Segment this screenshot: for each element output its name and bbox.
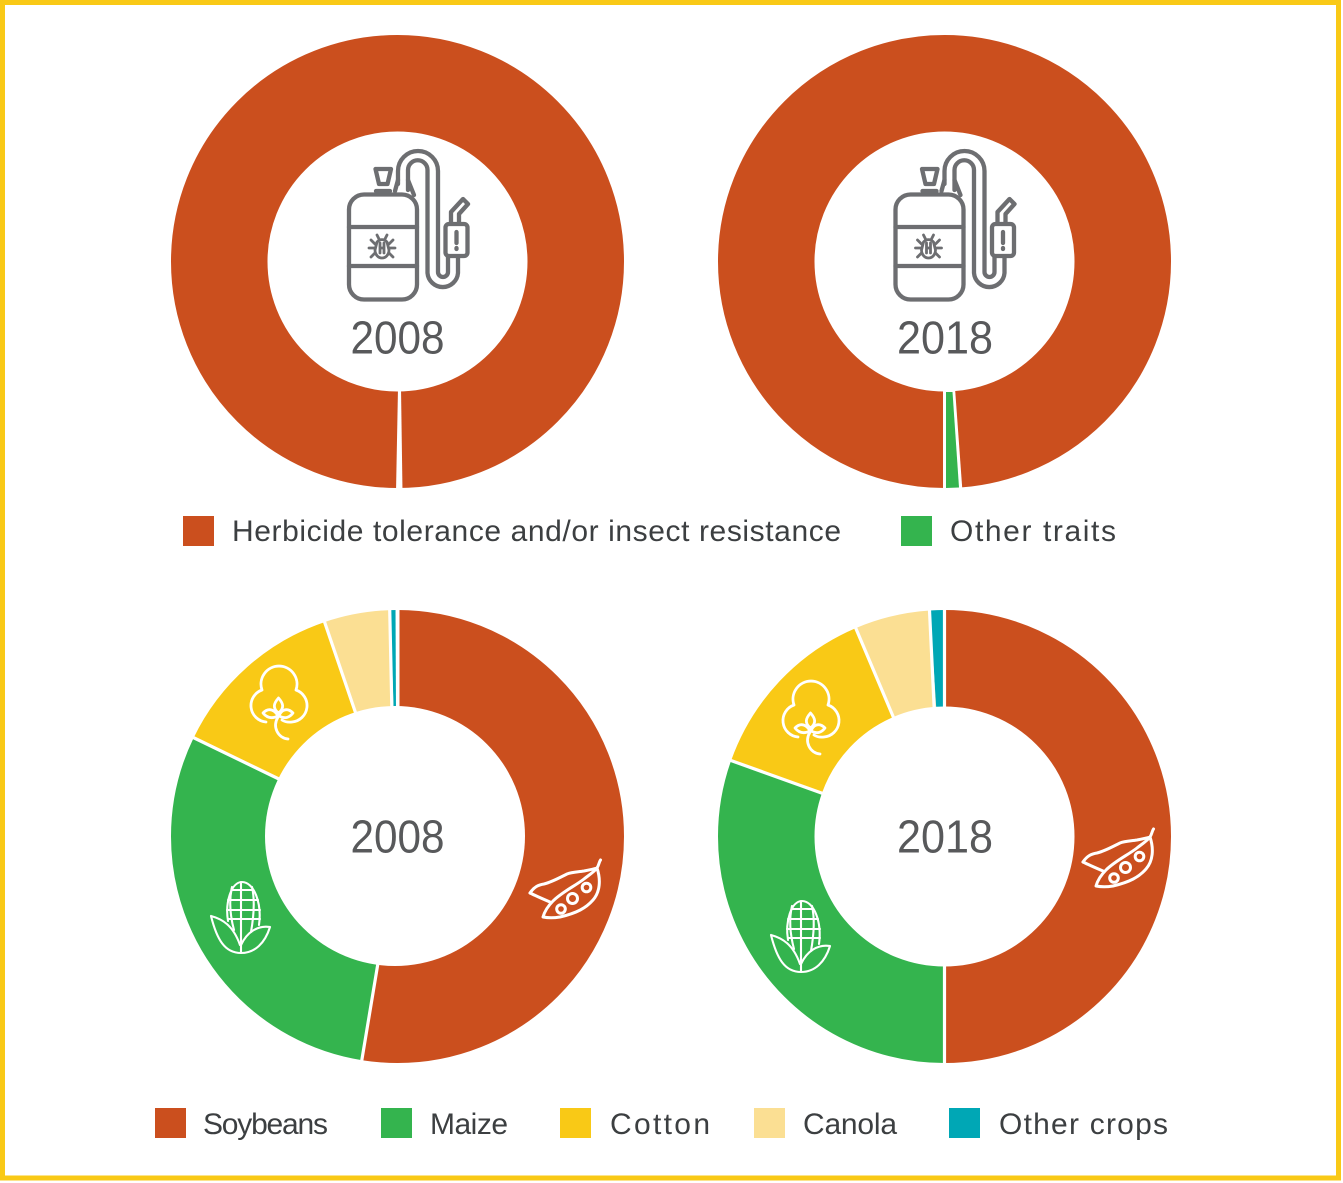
donut: traits 2018 — [766, 83, 1123, 492]
segment separators 2018 — [724, 600, 944, 1070]
icon: soybean pod 2008 — [530, 860, 600, 918]
donut: traits 2008 — [219, 83, 576, 492]
swatch: canola — [754, 1108, 785, 1138]
year label crops 2008: 2008 — [350, 810, 444, 862]
segment separators 2008 — [186, 600, 398, 1068]
year label 2018: 2018 — [897, 312, 993, 364]
swatch: cotton — [560, 1108, 591, 1138]
swatch: other traits — [901, 516, 932, 546]
ring segments 2018 — [766, 658, 1123, 1015]
year label crops 2018: 2018 — [897, 810, 993, 862]
label: soybeans: Soybeans — [203, 1108, 328, 1141]
donut: crops 2018 — [724, 600, 1154, 1070]
icon: cotton 2018 — [783, 681, 839, 754]
label: other crops: Other crops — [999, 1108, 1168, 1141]
wedge: other traits 2018 — [946, 392, 959, 488]
ring: herbicide tolerance and/or insect resistance 2018 — [766, 83, 1123, 440]
swatch: other crops — [949, 1108, 980, 1138]
swatch: herbicide tolerance — [183, 516, 214, 546]
icon: maize 2008 — [211, 882, 270, 953]
ring: herbicide tolerance and/or insect resistance 2008 — [219, 83, 576, 440]
label: cotton: Cotton — [610, 1108, 710, 1141]
icon: soybean pod 2018 — [1083, 829, 1154, 887]
gap: white wedge around other traits 2018 — [943, 388, 962, 492]
donut: crops 2008 — [186, 600, 600, 1068]
label: maize: Maize — [430, 1108, 508, 1141]
icon: sprayer 2008 — [349, 151, 468, 300]
icon: maize 2018 — [771, 901, 830, 972]
legend: traits — [183, 515, 1116, 548]
icon: sprayer 2018 — [896, 151, 1014, 300]
swatch: soybeans — [155, 1108, 186, 1138]
label: canola: Canola — [803, 1108, 897, 1141]
centre hole 2008 — [265, 706, 525, 966]
icon: cotton 2008 — [251, 666, 307, 739]
white gap before soybeans 2008 — [396, 605, 399, 712]
gap: other traits 2008 — [396, 388, 402, 492]
ring segments 2008 — [222, 661, 573, 1012]
year label 2008: 2008 — [350, 312, 444, 364]
label: other traits: Other traits — [950, 515, 1116, 548]
label: herbicide tolerance: Herbicide tolerance and/or insect resistance — [232, 515, 841, 548]
legend: crops — [155, 1108, 1168, 1141]
swatch: maize — [381, 1108, 412, 1138]
